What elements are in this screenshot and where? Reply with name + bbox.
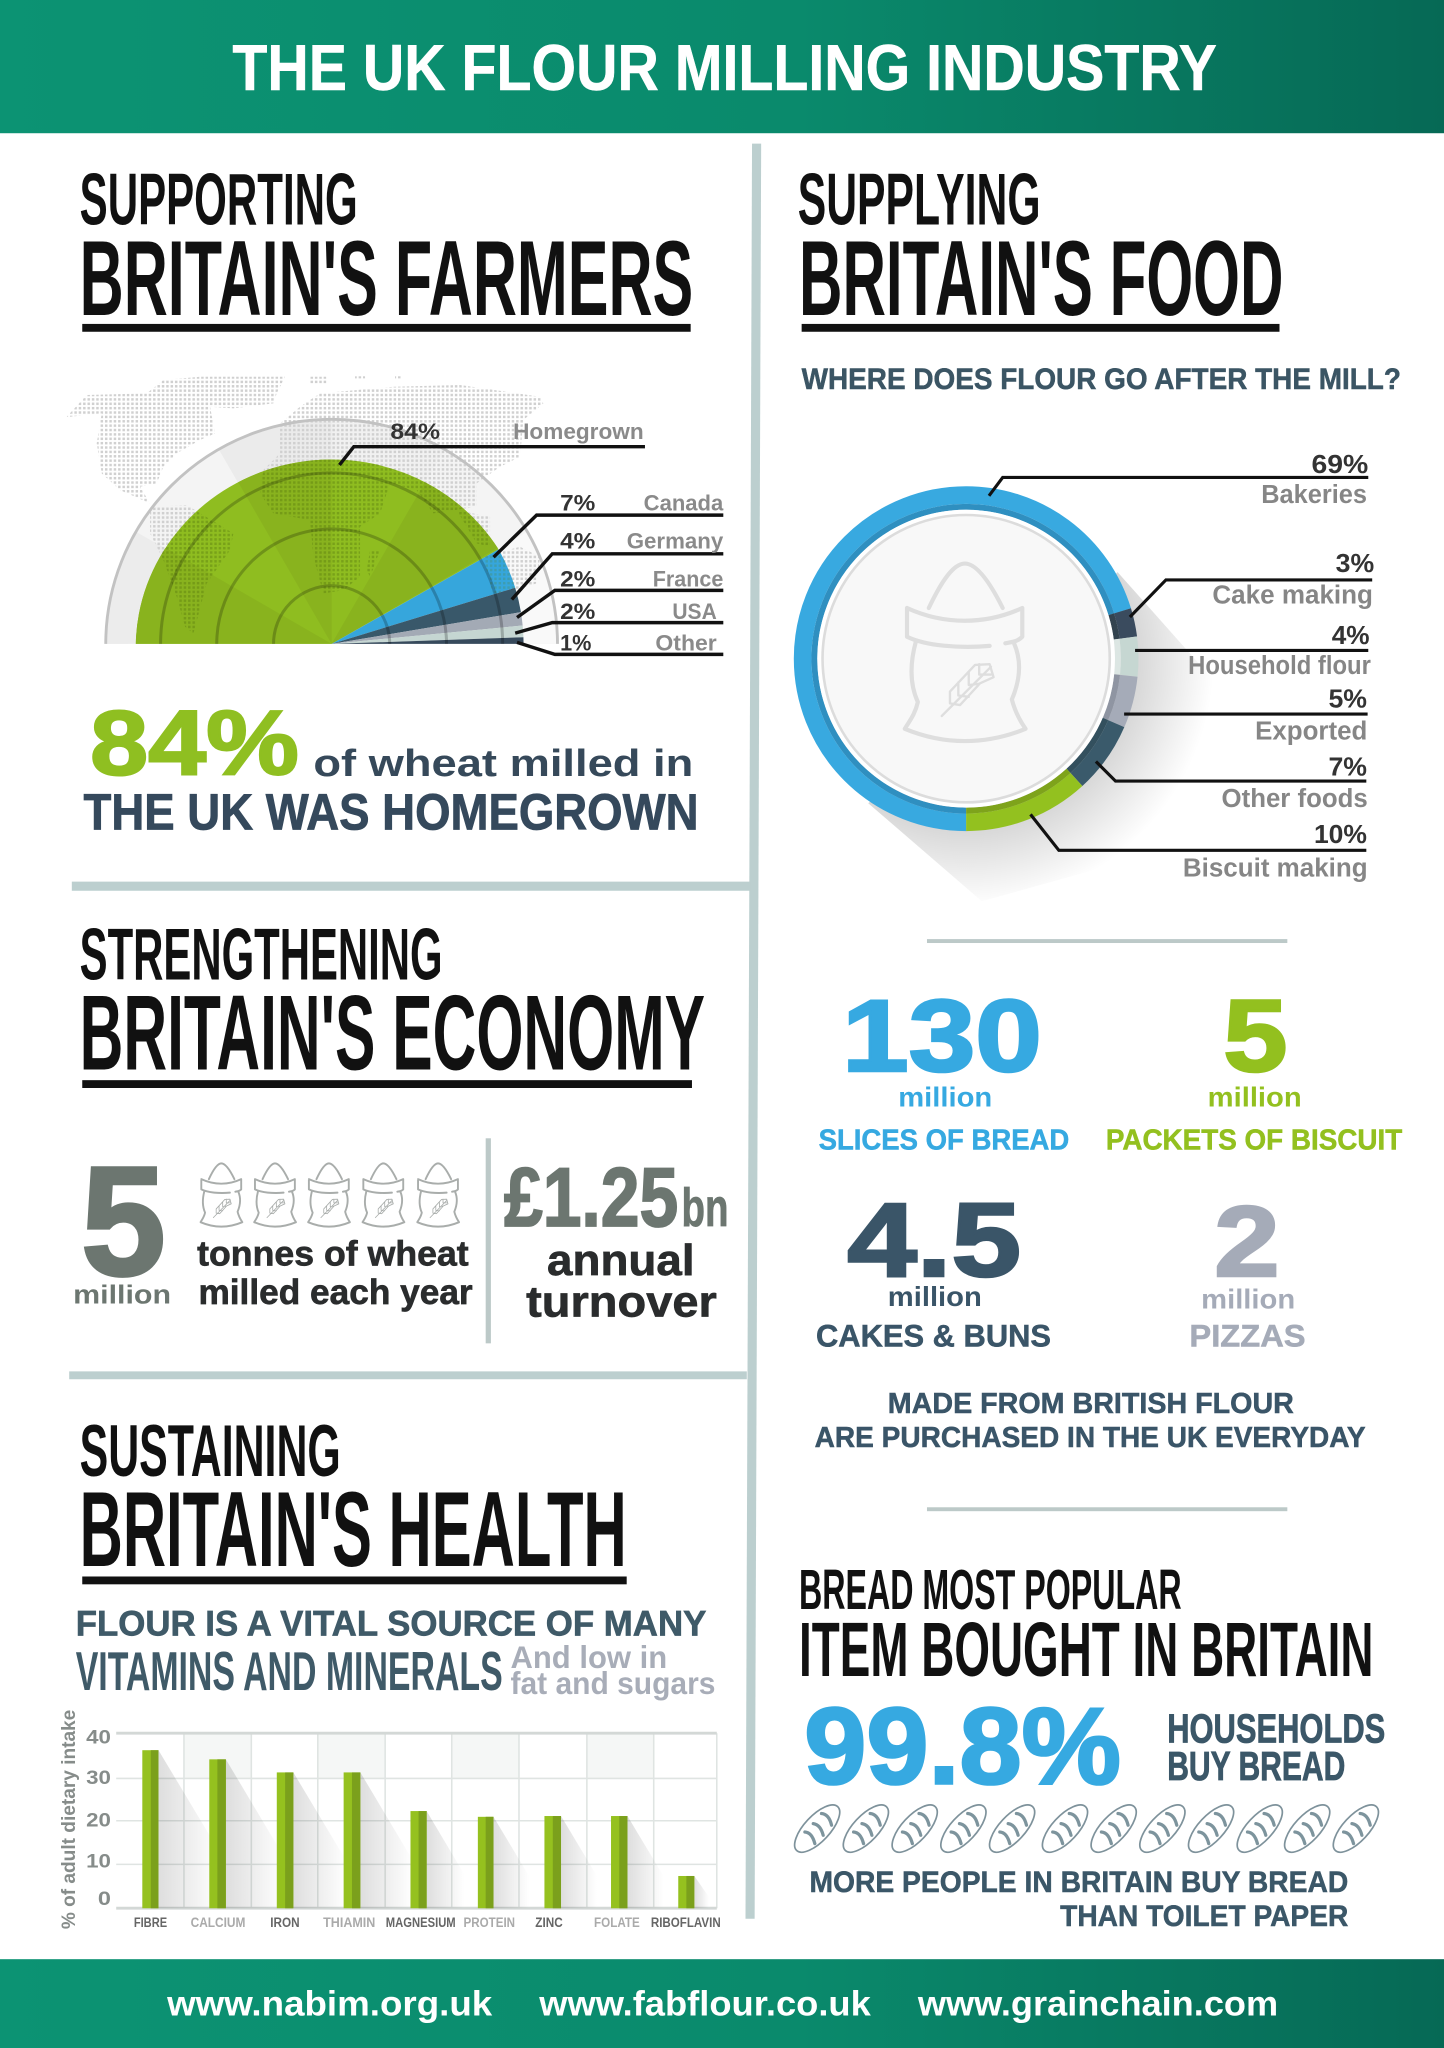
footer links [166, 1984, 1278, 2023]
stat: slices of bread: 130 [842, 979, 1042, 1093]
footer links: www.grainchain.com [917, 1984, 1278, 2023]
stat: annual turnover: £1.25 [504, 1150, 678, 1244]
text: vitamins and minerals: FLOUR IS A VITAL SOURCE OF MANY [76, 1604, 706, 1643]
stat: pizzas: million [1201, 1284, 1295, 1315]
footer links: www.nabim.org.uk [166, 1984, 493, 2023]
x axis labels: ZINC [535, 1915, 563, 1930]
column dividers [69, 144, 761, 1919]
heading: economy [80, 915, 705, 1093]
text: more people buy bread: MORE PEOPLE IN BRITAIN BUY BREAD [809, 1866, 1348, 1899]
x axis labels: PROTEIN [463, 1915, 515, 1930]
text: vitamins and minerals [76, 1604, 715, 1702]
heading: food [798, 160, 1283, 338]
callout: 84% homegrown [84, 693, 698, 840]
stat: packets of biscuit: million [1208, 1081, 1302, 1112]
chart: wheat origin semi-circle over world map [67, 376, 559, 644]
chart labels and leader lines: 7% [560, 491, 596, 516]
stat: slices of bread: SLICES OF BREAD [819, 1124, 1069, 1156]
panel: sustaining Britain's health [59, 1411, 721, 1930]
donut labels and leader lines: 4% [1332, 620, 1370, 650]
text: tonnes of wheat [197, 1235, 473, 1312]
heading: farmers: SUPPORTING [80, 160, 358, 241]
chart labels and leader lines: Canada [644, 491, 724, 516]
stat: annual turnover: annual [547, 1237, 695, 1285]
text: vitamins and minerals: And low in [510, 1640, 667, 1675]
stat: slices of bread: million [898, 1081, 992, 1112]
heading: economy: STRENGTHENING [80, 915, 443, 996]
donut labels and leader lines: 3% [1336, 548, 1374, 578]
chart labels and leader lines: France [653, 566, 723, 591]
panel: supporting Britain's farmers [60, 160, 724, 840]
heading: health: SUSTAINING [80, 1411, 341, 1492]
y axis labels: % of adult dietary intake [59, 1710, 80, 1929]
text: more people buy bread: THAN TOILET PAPER [1060, 1900, 1349, 1933]
callout: 84% homegrown: THE UK WAS HOMEGROWN [84, 783, 698, 840]
icons: row of bread loaves [787, 1798, 1386, 1859]
panel: strengthening Britain's economy [73, 915, 729, 1343]
text: tonnes of wheat: milled each year [198, 1273, 473, 1312]
donut labels and leader lines: 5% [1328, 684, 1367, 714]
chart labels and leader lines: Germany [627, 529, 724, 554]
stat: packets of biscuit: PACKETS OF BISCUIT [1106, 1124, 1403, 1156]
subheading: where does flour go: WHERE DOES FLOUR GO AFTER THE MILL? [802, 363, 1401, 396]
text: vitamins and minerals: VITAMINS AND MINERALS [76, 1640, 503, 1702]
panel: supplying Britain's food [735, 160, 1403, 1933]
heading: bread most popular [799, 1558, 1373, 1693]
chart labels and leader lines: 4% [560, 529, 596, 554]
stat: pizzas [1189, 1186, 1306, 1354]
chart labels and leader lines: 2% [560, 599, 596, 624]
x axis labels [134, 1915, 721, 1930]
y axis labels: 20 [86, 1811, 111, 1832]
icon: flour sack [905, 564, 1026, 741]
bar chart: share of adult dietary intake [59, 1710, 721, 1930]
donut labels and leader lines: Household flour [1188, 650, 1371, 680]
chart labels and leader lines: Other [655, 630, 717, 655]
stat: packets of biscuit: 5 [1223, 979, 1287, 1093]
stat: 99.8% households: BUY BREAD [1167, 1743, 1345, 1789]
chart labels and leader lines: 2% [560, 566, 596, 591]
donut labels and leader lines: Cake making [1212, 579, 1373, 609]
icons: five flour sacks [201, 1163, 459, 1227]
title: THE UK FLOUR MILLING INDUSTRY [232, 31, 1217, 104]
y axis labels: 0 [98, 1889, 111, 1910]
text: made from British flour: ARE PURCHASED IN THE UK EVERYDAY [815, 1422, 1366, 1454]
donut labels and leader lines: 10% [1314, 819, 1367, 849]
heading: health: BRITAIN'S HEALTH [80, 1469, 627, 1589]
x axis labels: FOLATE [594, 1915, 640, 1930]
x axis labels: MAGNESIUM [386, 1915, 456, 1930]
chart labels and leader lines [339, 419, 724, 655]
y axis labels [59, 1710, 111, 1929]
text: more people buy bread [809, 1866, 1349, 1933]
x axis labels: IRON [270, 1915, 300, 1930]
header banner [0, 0, 1444, 133]
stat: slices of bread [819, 979, 1069, 1156]
y axis labels: 40 [86, 1728, 111, 1749]
stat: annual turnover: turnover [526, 1279, 717, 1327]
callout: 84% homegrown: 84% [90, 693, 299, 795]
stat: cakes and buns: CAKES & BUNS [816, 1319, 1051, 1354]
donut labels and leader lines: Other foods [1222, 783, 1368, 813]
x axis labels: CALCIUM [191, 1915, 245, 1930]
stat: 99.8% households [804, 1685, 1385, 1806]
stat: packets of biscuit [1106, 979, 1403, 1156]
x axis labels: FIBRE [134, 1915, 167, 1930]
heading: food: SUPPLYING [798, 160, 1041, 241]
stat: cakes and buns: 4.5 [847, 1182, 1021, 1299]
text: vitamins and minerals: fat and sugars [510, 1666, 715, 1701]
heading: farmers: BRITAIN'S FARMERS [80, 218, 693, 338]
donut chart: flour destinations [735, 428, 1253, 901]
stat: pizzas: PIZZAS [1189, 1319, 1306, 1354]
stat: annual turnover: bn [682, 1179, 729, 1238]
stat: pizzas: 2 [1214, 1186, 1279, 1298]
footer banner [0, 1959, 1444, 2048]
donut labels and leader lines: 69% [1311, 449, 1368, 479]
heading: economy: BRITAIN'S ECONOMY [80, 973, 705, 1093]
chart labels and leader lines: USA [672, 599, 717, 624]
text: made from British flour: MADE FROM BRITISH FLOUR [888, 1388, 1294, 1420]
donut labels and leader lines: Exported [1255, 715, 1367, 745]
stat: 5 million: million [73, 1280, 171, 1310]
donut labels and leader lines: Biscuit making [1183, 852, 1368, 882]
chart labels and leader lines: 84% [390, 419, 440, 444]
heading: farmers [80, 160, 693, 338]
callout: 84% homegrown: of wheat milled in [313, 743, 693, 785]
donut labels and leader lines [989, 449, 1374, 882]
heading: health [80, 1411, 627, 1589]
y axis labels: 30 [86, 1768, 111, 1789]
bar shadows [159, 1750, 717, 1908]
chart labels and leader lines: 1% [560, 630, 592, 655]
donut labels and leader lines: Bakeries [1261, 479, 1367, 509]
bars [142, 1750, 694, 1908]
x axis labels: THIAMIN [323, 1915, 375, 1930]
stat: 99.8% households: 99.8% [804, 1685, 1121, 1806]
stat: 5 million: 5 [81, 1134, 166, 1308]
text: made from British flour [815, 1388, 1366, 1454]
x axis labels: RIBOFLAVIN [651, 1915, 721, 1930]
footer links: www.fabflour.co.uk [538, 1984, 871, 2023]
chart labels and leader lines: Homegrown [513, 419, 644, 444]
y axis labels: 10 [86, 1852, 111, 1873]
donut labels and leader lines: 7% [1328, 751, 1367, 781]
stat: annual turnover [504, 1150, 729, 1327]
text: tonnes of wheat: tonnes of wheat [197, 1235, 469, 1274]
stat: cakes and buns [816, 1182, 1051, 1354]
stat: cakes and buns: million [888, 1281, 982, 1312]
